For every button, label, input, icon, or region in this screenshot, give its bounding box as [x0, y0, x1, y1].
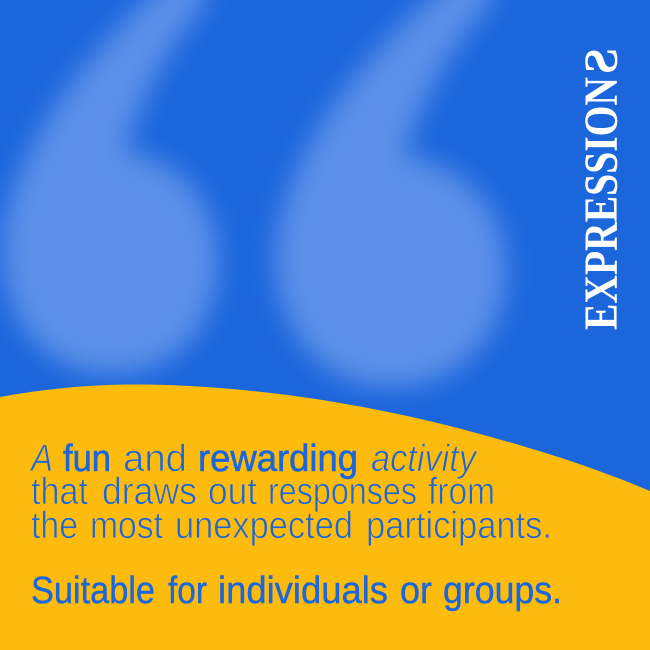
- text block: suitability statement: individuals: [218, 570, 388, 612]
- yellow curved panel: [0, 384, 650, 650]
- text line 3: unexpected: [175, 505, 353, 547]
- text line 2: responses: [268, 471, 417, 513]
- text line 2: out: [208, 471, 257, 513]
- text block: suitability statement: groups.: [443, 570, 562, 612]
- text line 2: draws: [102, 471, 197, 513]
- text line 3: most: [90, 505, 163, 547]
- text line 1: rewarding: [198, 438, 358, 480]
- text block: suitability statement: or: [400, 570, 432, 612]
- text line 2: [31, 471, 495, 513]
- title mirrored final letter: S: [575, 48, 628, 74]
- text line 1: and: [123, 438, 187, 480]
- text line 2: that: [31, 471, 88, 513]
- text line 3: participants.: [366, 505, 552, 547]
- text line 3: [31, 505, 552, 547]
- text block: suitability statement: [31, 570, 562, 612]
- text line 3: the: [31, 505, 78, 547]
- icon: blurred quotation marks: [2, 0, 506, 387]
- text line 1: [29, 438, 478, 480]
- vertical brand title: [575, 48, 628, 330]
- text block: description: [29, 438, 552, 547]
- title letters: EXPRESSION: [575, 77, 628, 330]
- text line 1: fun: [63, 438, 111, 480]
- icon: left quotation mark: [2, 0, 218, 374]
- text line 1: A: [29, 438, 53, 480]
- text line 1: activity: [371, 438, 478, 480]
- text block: suitability statement: for: [168, 570, 207, 612]
- text block: suitability statement: Suitable: [31, 570, 155, 612]
- icon: right quotation mark: [275, 0, 506, 387]
- text line 2: from: [428, 471, 495, 513]
